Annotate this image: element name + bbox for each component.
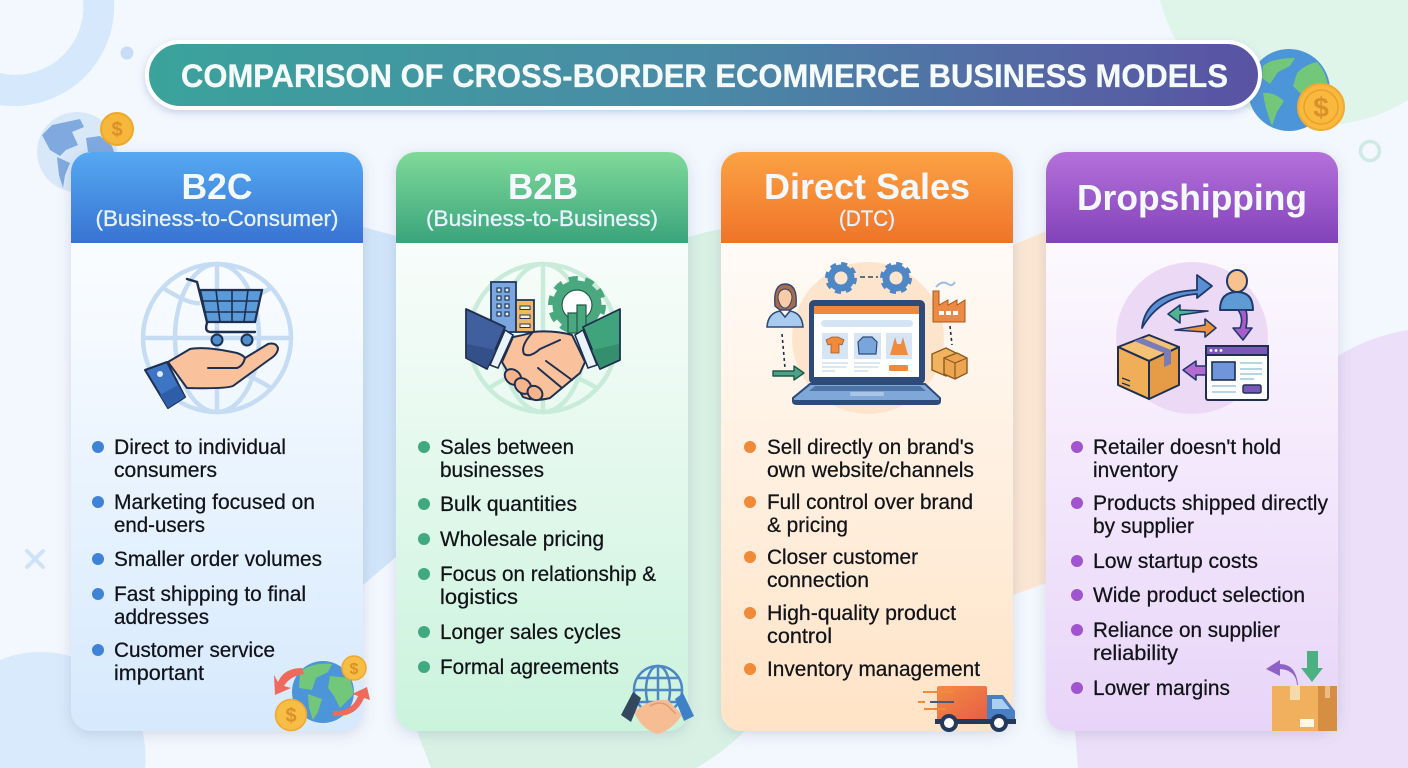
bullet list: Lower margins [1093,677,1230,700]
heading: Dropshipping: Dropshipping [1077,177,1307,218]
icon: globe with coin (top right): $ [1313,92,1329,123]
bullet list: Smaller order volumes [114,548,322,571]
subheading: (Business-to-Consumer) [96,206,338,231]
bullet list: Marketing focused on [114,491,315,514]
icon: hand holding cart over globe [143,264,291,412]
bullet list: Sales between [440,436,574,459]
heading: Direct Sales: Direct Sales [764,166,970,207]
icon: faded world map with coin (top left) [37,112,133,192]
heading: B2C: B2C [182,166,252,207]
icon: dropshipping flow with box, customer, storefront [1116,262,1268,414]
bullet list: Inventory management [767,658,980,681]
subheading: (DTC) [839,206,895,231]
heading: B2B: B2B [508,166,578,207]
icon: delivery truck [918,686,1016,730]
icon: globe with coins and arrows: $ [285,705,297,727]
bullet list: end-users [114,514,205,537]
bullet list: Full control over brand [767,491,973,514]
icon: parcel with return and inbound arrows [1266,651,1337,731]
bullet list: by supplier [1093,515,1194,538]
bullet list: Retailer doesn't hold [1093,436,1281,459]
bullet list [92,436,322,685]
panel: Dropshipping [1046,152,1338,731]
panel: B2B [396,152,694,734]
bullet list: own website/channels [767,459,974,482]
icon: laptop storefront with person, factory and boxes [767,262,967,414]
panel: Direct Sales [721,152,1016,731]
icon: globe with coins and arrows: $ [350,661,359,678]
title: COMPARISON OF CROSS-BORDER ECOMMERCE BUSINESS MODELS [181,58,1228,94]
icon: faded world map with coin (top left): $ [111,119,123,141]
bullet list: & pricing [767,514,848,537]
bullet list: reliability [1093,642,1179,665]
bullet list [1071,436,1328,700]
title banner [147,42,1260,108]
icon: handshake with buildings and gear [466,264,620,412]
bullet list: Closer customer [767,546,918,569]
icon: globe with coins and arrows [274,656,370,730]
bullet list: Low startup costs [1093,550,1258,573]
bullet list: control [767,625,832,648]
bullet list: important [114,662,204,685]
bullet list: Fast shipping to final [114,583,306,606]
bullet list: Bulk quantities [440,493,577,516]
bullet list: consumers [114,459,217,482]
bullet list: businesses [440,459,544,482]
icon: small handshake with globe [621,666,694,734]
bullet list: Longer sales cycles [440,621,621,644]
bullet list [744,436,980,681]
bullet list: Products shipped directly [1093,492,1328,515]
bullet list: Wide product selection [1093,584,1305,607]
bullet list: Reliance on supplier [1093,619,1280,642]
bullet list: Wholesale pricing [440,528,604,551]
bullet list: Direct to individual [114,436,286,459]
subheading: (Business-to-Business) [426,206,658,231]
bullet list: Customer service [114,639,275,662]
bullet list: addresses [114,606,209,629]
panel: B2C [71,152,370,731]
bullet list: Formal agreements [440,656,619,679]
bullet list: connection [767,569,869,592]
bullet list: Focus on relationship & [440,563,656,586]
bullet list [418,436,656,679]
bullet list: High-quality product [767,602,956,625]
bullet list: Sell directly on brand's [767,436,974,459]
bullet list: inventory [1093,459,1178,482]
icon: globe with coin (top right) [1248,49,1344,131]
bullet list: logistics [440,586,518,609]
